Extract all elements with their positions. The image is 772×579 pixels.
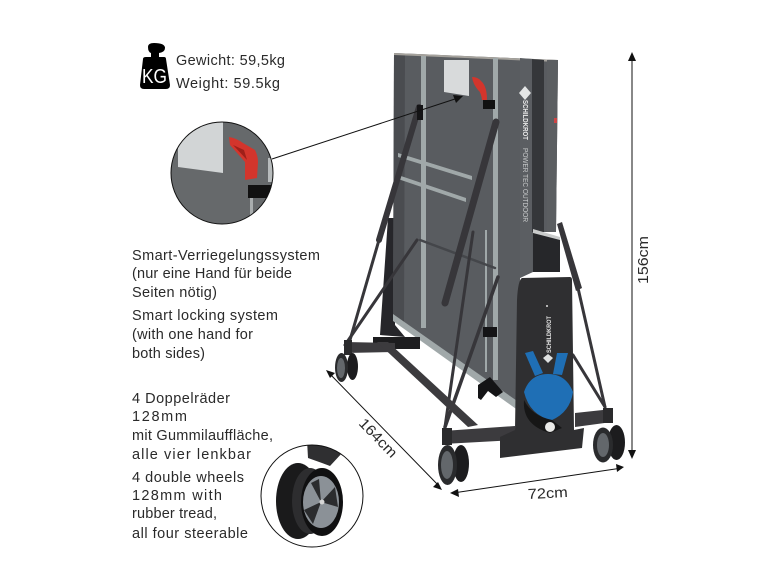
logo and product name: SCHILDKROT (521, 100, 528, 141)
table tennis table (335, 53, 625, 485)
table tennis table: SCHILDKROT (546, 316, 553, 353)
dimension: height 156cm: 156cm (636, 236, 652, 284)
ball holder and ball (524, 400, 562, 433)
text: locking system: (with one hand for (132, 327, 253, 343)
text: locking system: Smart locking system (132, 308, 278, 324)
table surface (393, 53, 558, 410)
text: weight: Weight: 59.5kg (176, 76, 280, 92)
base frame (344, 340, 613, 445)
detail circle: locking lever (170, 120, 275, 228)
dimension: width 72cm (450, 464, 624, 503)
icon: weight (140, 43, 170, 89)
detail circle: wheel (261, 440, 363, 547)
red lever (472, 77, 487, 100)
text: wheels: alle vier lenkbar (132, 447, 251, 463)
text: locking system: (nur eine Hand für beide (132, 266, 292, 282)
arrow: lever callout (272, 95, 463, 159)
logo and product name (519, 86, 531, 222)
text: locking system (132, 248, 320, 362)
table foot brackets (373, 105, 503, 400)
table rear dark side (380, 218, 405, 337)
wheels (335, 353, 625, 485)
text: wheels: 128mm (132, 409, 187, 425)
logo and product name: POWER TEC OUTDOOR (521, 148, 528, 222)
text: locking system: Seiten nötig) (132, 285, 217, 301)
text: wheels: all four steerable (132, 526, 248, 542)
dimension: height 156cm (628, 52, 652, 459)
blue paddles (524, 351, 573, 420)
icon: weight: KG (142, 66, 167, 88)
rule sheet (444, 60, 469, 96)
dimension: length 164cm (326, 370, 442, 490)
carriage panel (500, 277, 584, 458)
text: wheels: 128mm with (132, 488, 222, 504)
dimension: width 72cm: 72cm (527, 485, 568, 503)
text: locking system: Smart-Verriegelungssystem (132, 248, 320, 264)
text: wheels: 4 Doppelräder (132, 391, 230, 407)
text: wheels: mit Gummilauffläche, (132, 428, 273, 444)
text: wheels: rubber tread, (132, 506, 217, 522)
text: weight (176, 53, 285, 92)
text: locking system: both sides) (132, 346, 205, 362)
text: wheels: 4 double wheels (132, 470, 244, 486)
folded net (533, 230, 560, 272)
text: wheels (132, 391, 273, 542)
frame struts (345, 107, 605, 427)
dimension: length 164cm: 164cm (355, 416, 400, 461)
text: weight: Gewicht: 59,5kg (176, 53, 285, 69)
silver rails (393, 56, 520, 411)
